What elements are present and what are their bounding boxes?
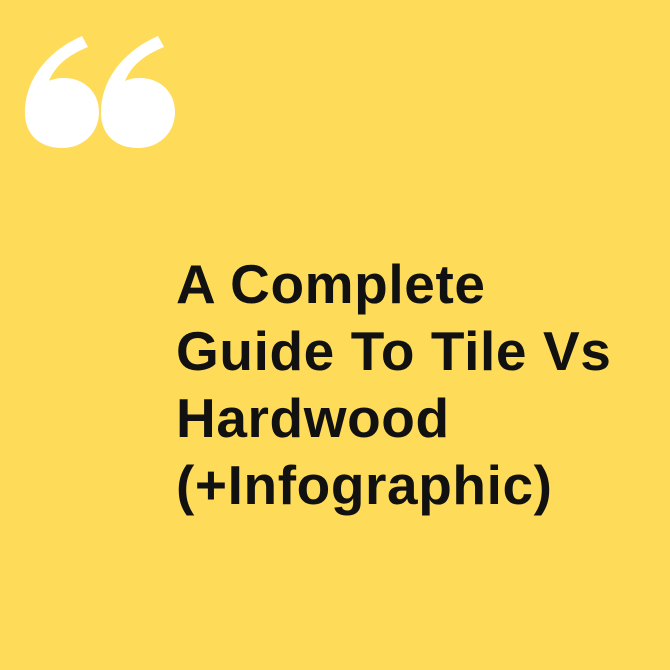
title: Guide To Tile Vs	[176, 320, 611, 382]
icon: quotation marks	[24, 36, 175, 148]
title: A Complete	[176, 253, 486, 315]
title: (+Infographic)	[176, 454, 553, 516]
title	[176, 253, 611, 516]
title: Hardwood	[176, 387, 450, 449]
